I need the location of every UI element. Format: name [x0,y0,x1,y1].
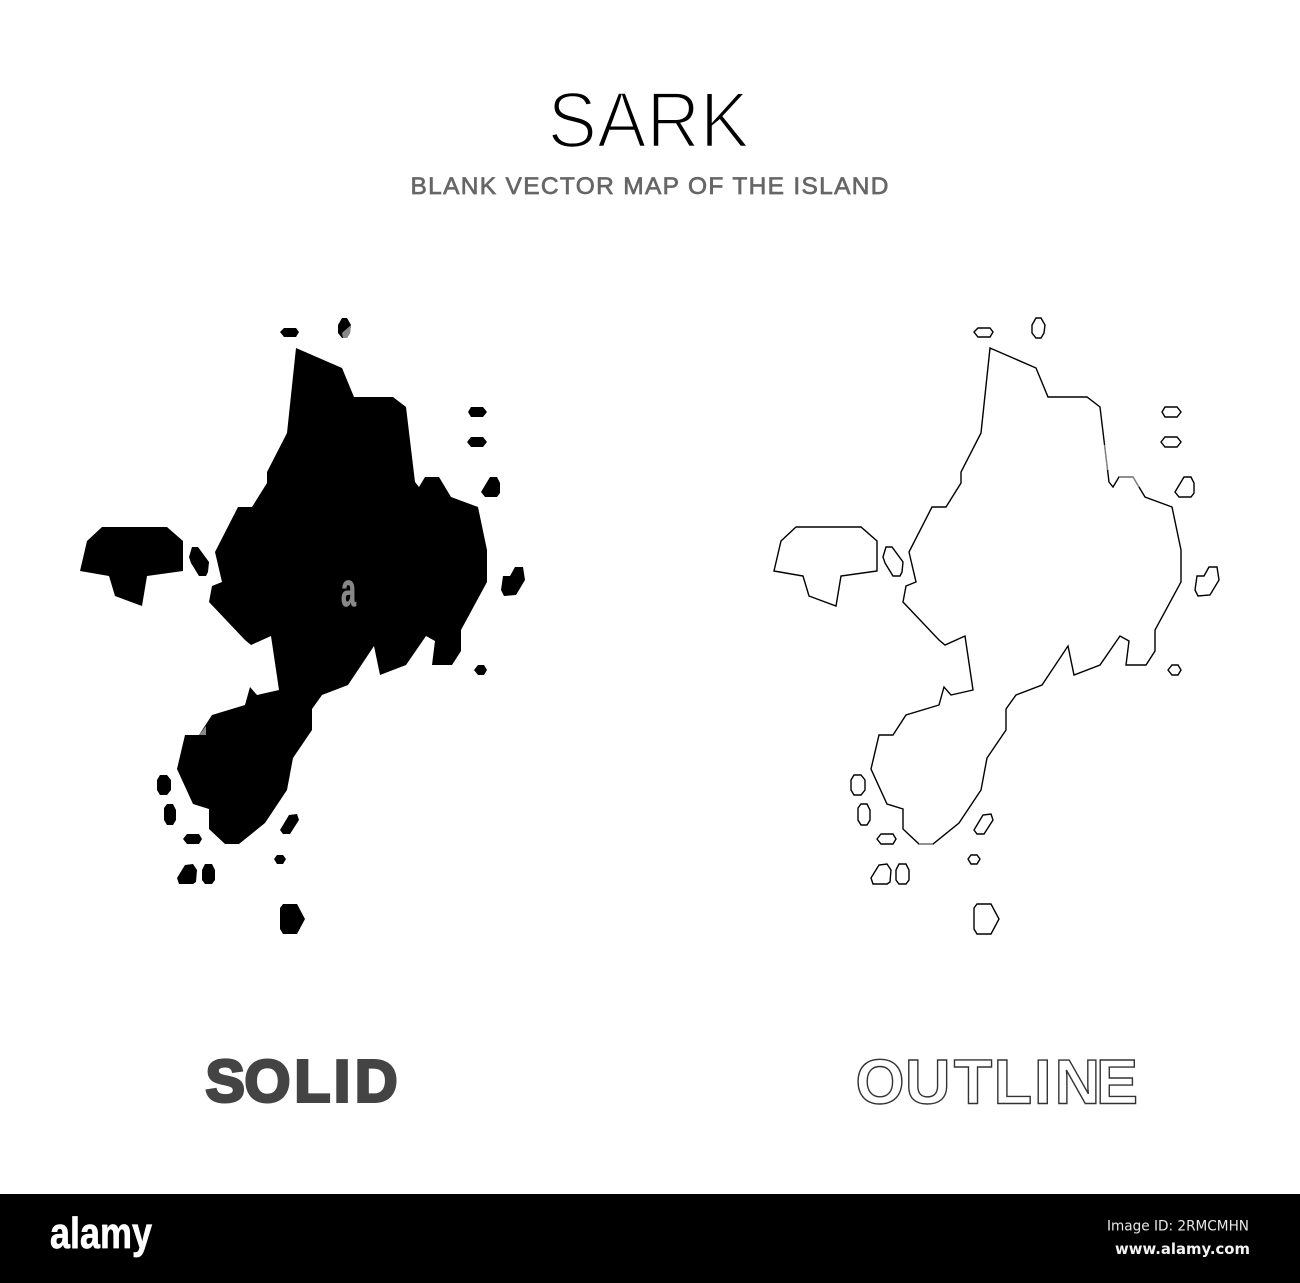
west islet solid [80,527,183,606]
title: SARK [548,75,750,164]
website: www.alamy.com [1115,1240,1250,1258]
map: outline [774,318,1219,934]
watermark letter on map: a [341,563,356,616]
footer bar [0,1194,1300,1283]
label: solid: SOLID [206,1048,398,1114]
map: solid [80,318,525,934]
image id: Image ID: 2RMCMHN [1107,1218,1249,1234]
small islets solid [157,318,525,934]
footer logo: alamy [50,1209,152,1258]
label: outline: OUTLINE [856,1047,1138,1117]
watermark fragments on map [199,325,351,735]
small islets outline [851,318,1219,934]
main island solid [177,348,487,844]
subtitle: BLANK VECTOR MAP OF THE ISLAND [410,173,888,200]
west islet outline [774,527,877,606]
main island outline [871,348,1181,844]
